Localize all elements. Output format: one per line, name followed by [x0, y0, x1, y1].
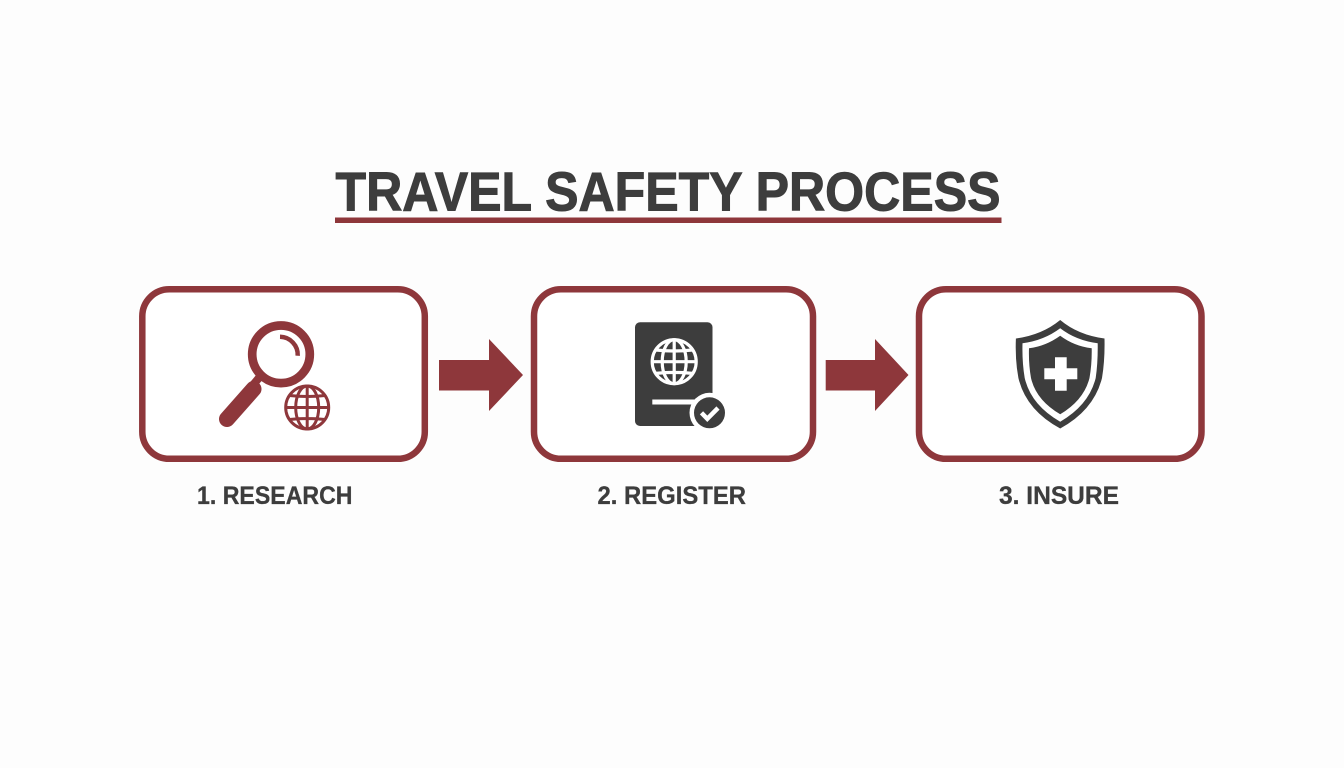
panel: step 2 register	[534, 289, 813, 459]
panel: step 3 insure	[919, 289, 1202, 459]
icon: magnifying glass	[227, 326, 310, 419]
arrow: step 1 to step 2	[439, 339, 523, 411]
icon: check badge	[690, 393, 730, 433]
title: TRAVEL SAFETY PROCESS	[336, 160, 1000, 222]
icon: shield with cross	[1016, 320, 1105, 428]
arrow: step 2 to step 3	[826, 339, 908, 411]
label: 3. insure: 3. INSURE	[999, 482, 1119, 510]
icon: globe	[286, 386, 329, 429]
panel: step 1 research	[142, 289, 425, 459]
label: 1. research: 1. RESEARCH	[197, 482, 352, 510]
label: 2. register: 2. REGISTER	[598, 482, 746, 510]
icon: passport	[635, 322, 730, 433]
